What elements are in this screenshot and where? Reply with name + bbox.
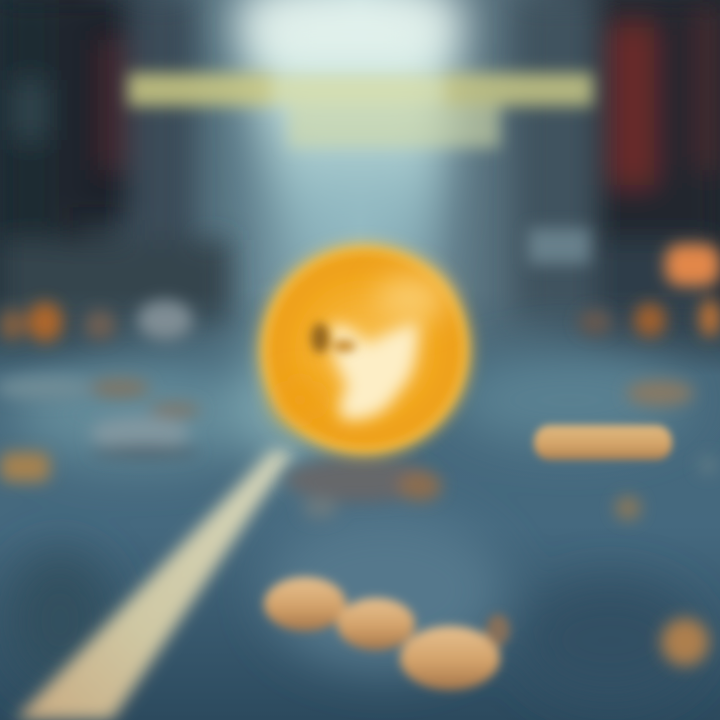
light beam at the end of the street (235, 0, 462, 340)
gold pieces in the foreground (264, 577, 510, 690)
right golden bar (534, 425, 672, 460)
left buildings (0, 0, 230, 330)
bright sign, right building (528, 228, 590, 264)
coin emblem shadow (311, 323, 356, 353)
bright sky opening (260, 0, 440, 45)
hazy yellow banner (128, 73, 593, 148)
street reflections (5, 330, 700, 700)
distant orange street lights, left (0, 300, 193, 342)
reflection beneath the coin (285, 458, 442, 519)
distant orange lights, right (578, 244, 720, 337)
coin highlights (278, 275, 445, 420)
golden coin (259, 244, 471, 456)
left street debris (0, 376, 201, 482)
right buildings (520, 0, 720, 320)
coin emblem (330, 322, 418, 420)
right street debris (615, 380, 718, 666)
road line leading to the coin (15, 450, 294, 720)
wet street surface (0, 290, 720, 720)
